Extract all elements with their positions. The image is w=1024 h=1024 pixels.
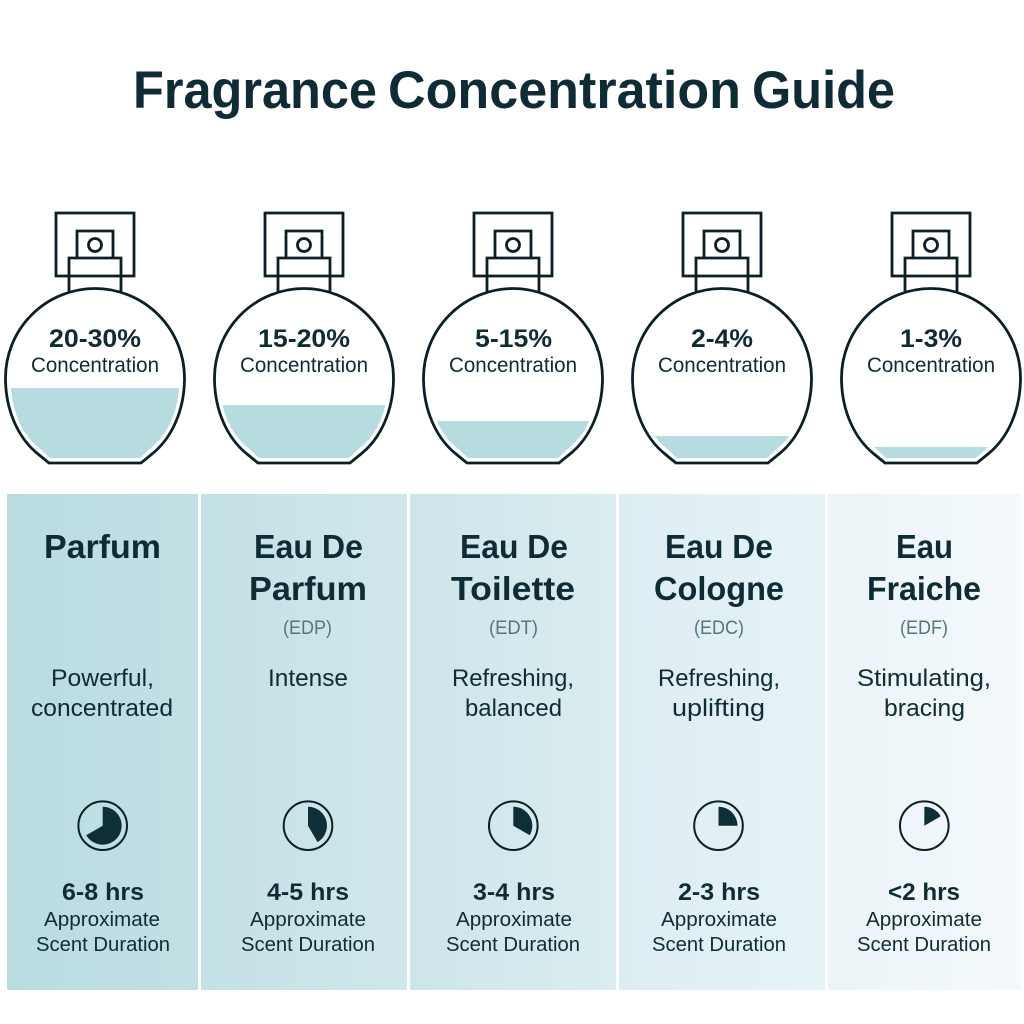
nozzle [716,238,728,252]
nozzle [88,238,102,252]
abbreviation: (EDC) [694,618,744,639]
description: Refreshing, [658,665,780,692]
concentration label: 20-30% [49,325,141,353]
concentration label [867,325,995,377]
panel background [619,494,825,990]
abbreviation: (EDT) [489,618,538,639]
bottle outline [424,213,602,463]
description: Stimulating, [857,665,991,692]
description: Intense [268,665,348,692]
duration: Scent Duration [652,934,786,956]
duration [652,879,786,956]
duration: Approximate [866,909,982,931]
liquid level [654,436,790,458]
concentration label [240,325,368,377]
concentration label: 1-3% [900,325,962,353]
icon: clock under 2 hrs [900,801,949,850]
bottle outline [214,213,394,463]
bottle: Eau De Toilette 5-15% [418,213,608,463]
duration [857,879,991,956]
concentration label: Concentration [449,354,577,377]
liquid level [10,388,179,458]
bottle: Eau Fraiche 1-3% [836,213,1024,463]
nozzle [298,238,310,252]
abbreviation: (EDF) [900,618,948,639]
description: Powerful, [51,665,154,692]
duration: 6-8 hrs [62,879,144,906]
concentration label: Concentration [31,354,159,377]
duration: 3-4 hrs [473,879,555,906]
heading: Eau De [460,528,568,565]
bottle outline [6,213,184,463]
concentration label [449,325,577,377]
heading [654,528,784,607]
description: bracing [884,695,965,722]
duration: Scent Duration [241,934,375,956]
duration: Scent Duration [36,934,170,956]
concentration label [658,325,786,377]
concentration label: 15-20% [258,325,350,353]
heading [867,528,981,607]
title: Fragrance [133,61,377,120]
duration [446,879,580,956]
liquid level [874,447,988,458]
heading [249,528,367,607]
panel background [201,494,407,990]
concentration label: Concentration [658,354,786,377]
heading: Eau De [254,528,363,565]
concentration label: Concentration [867,354,995,377]
concentration label [31,325,159,377]
heading: Fraiche [867,570,981,607]
nozzle [506,238,520,252]
icon: clock 6-8 hrs [78,801,127,850]
concentration label: Concentration [240,354,368,377]
duration: Approximate [661,909,777,931]
panel background [7,494,198,990]
bottle outline [842,213,1020,463]
description: uplifting [672,695,765,722]
title: Guide [752,61,895,120]
icon: clock 2-3 hrs [694,801,743,850]
panel: Eau Fraiche [828,494,1021,990]
duration [36,879,170,956]
description [31,665,173,722]
icon: clock 4-5 hrs [284,801,332,850]
panel: Eau De Cologne [619,494,825,990]
nozzle [924,238,938,252]
bottle: Eau De Cologne 2-4% [627,213,817,463]
heading: Parfum [249,570,367,607]
heading: Cologne [654,570,784,607]
bottle outline [632,213,812,463]
duration [241,879,375,956]
bottle: Eau De Parfum 15-20% [209,213,399,463]
description [857,665,991,722]
description: concentrated [31,695,173,722]
icon: clock 3-4 hrs [489,801,538,850]
heading: Toilette [451,570,575,607]
heading: Parfum [44,528,161,565]
panel: Parfum [7,494,198,990]
heading: Eau [896,528,953,565]
concentration label: 2-4% [691,325,753,353]
duration: 4-5 hrs [267,879,349,906]
panel background [410,494,616,990]
abbreviation: (EDP) [283,618,332,639]
description [452,665,574,722]
liquid level [436,421,589,458]
description: Refreshing, [452,665,574,692]
duration: Approximate [456,909,572,931]
heading: Eau De [665,528,773,565]
description: balanced [465,695,562,722]
concentration label: 5-15% [475,325,552,353]
title: Concentration [388,61,741,120]
duration: Scent Duration [857,934,991,956]
panel background [828,494,1021,990]
panel: Eau De Parfum [201,494,407,990]
duration: 2-3 hrs [678,879,760,906]
bottle: Parfum 20-30% [0,213,190,463]
duration: Approximate [44,909,160,931]
description [658,665,780,722]
liquid level [222,405,386,458]
duration: <2 hrs [888,879,960,906]
title [133,61,895,120]
heading [451,528,575,607]
duration: Approximate [250,909,366,931]
panel: Eau De Toilette [410,494,616,990]
duration: Scent Duration [446,934,580,956]
